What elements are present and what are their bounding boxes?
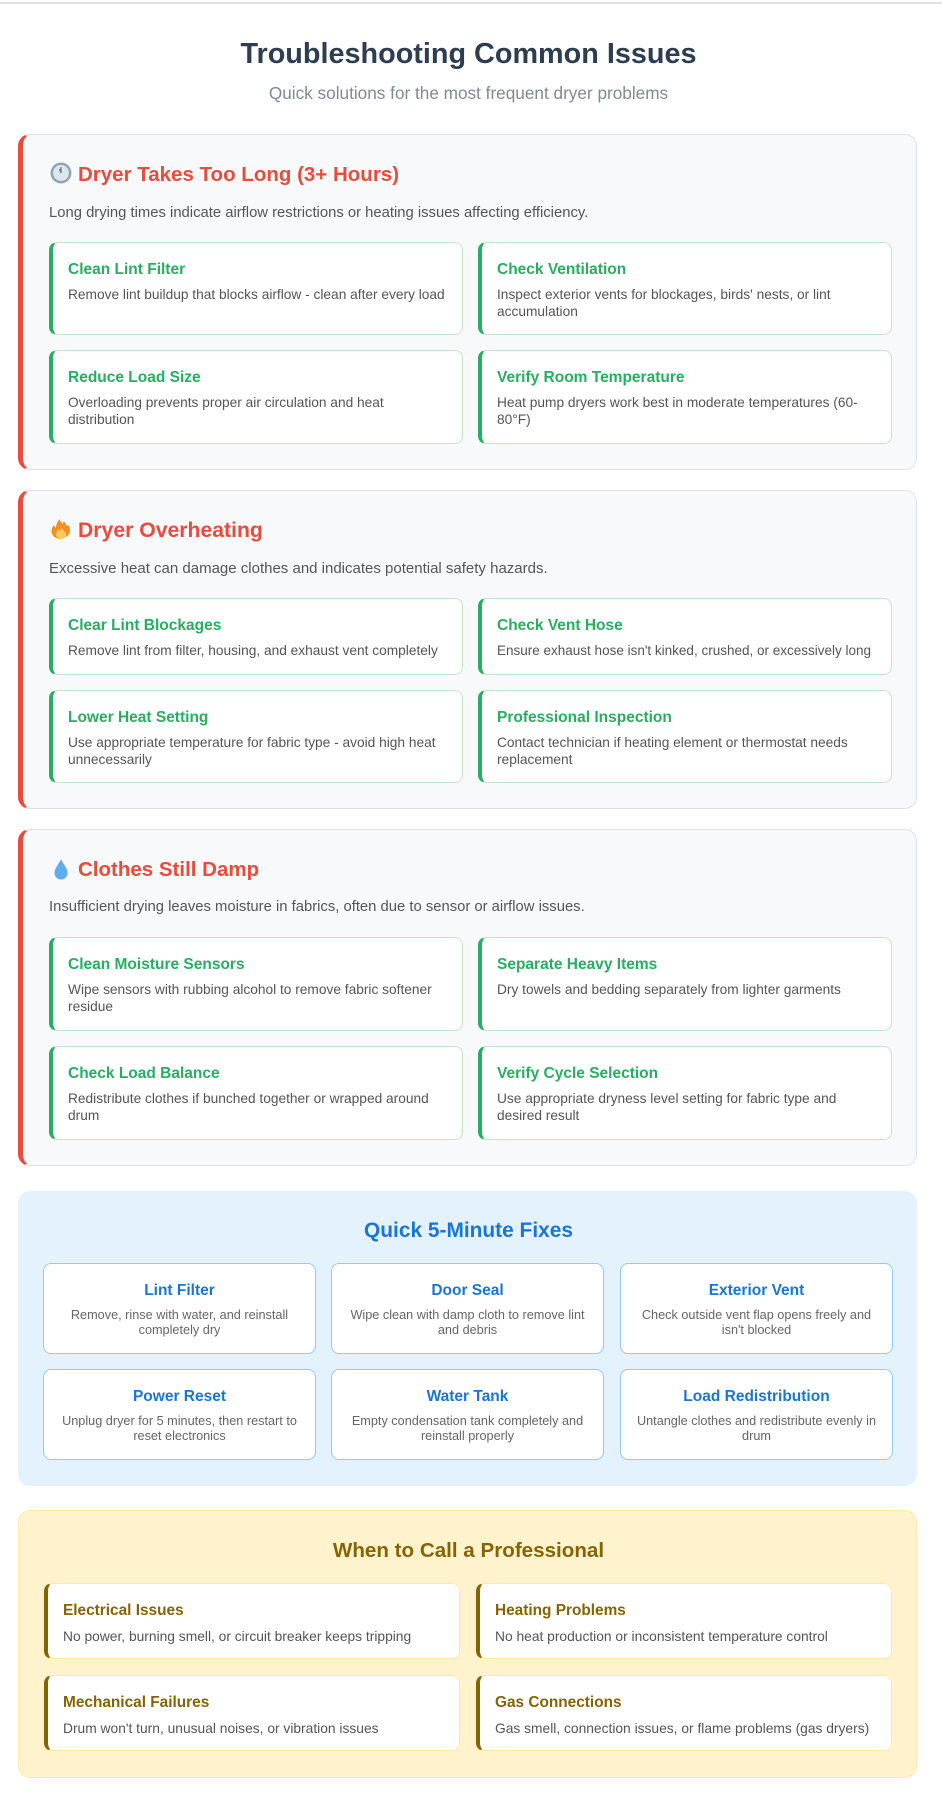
card: professional inspection: replacement: [497, 752, 572, 766]
fix: load redistribution: Untangle clothes and redistribute evenly in: [637, 1414, 876, 1428]
card: check vent hose: [478, 598, 892, 675]
fix: door seal: Door Seal: [431, 1282, 504, 1299]
card: clear lint blockages: Clear Lint Blockages: [68, 617, 221, 634]
item: mechanical failures: Drum won't turn, unusual noises, or vibration issues: [63, 1721, 379, 1736]
heading: quick fixes: Quick 5-Minute Fixes: [364, 1219, 573, 1242]
panel: clothes still damp: [18, 829, 917, 1166]
card: verify room temperature: [478, 350, 892, 444]
fix: power reset: Unplug dryer for 5 minutes, then restart to: [62, 1414, 297, 1428]
subtitle: Quick solutions for the most frequent dryer problems: [269, 83, 668, 103]
fix: load redistribution: [620, 1369, 893, 1460]
card: lower heat setting: Lower Heat Setting: [68, 709, 208, 726]
card: separate heavy items: [478, 937, 892, 1031]
card: check vent hose: Ensure exhaust hose isn't kinked, crushed, or excessively long: [497, 643, 871, 658]
card: clear lint blockages: [49, 598, 463, 675]
heading: dryer overheating: Dryer Overheating: [78, 519, 263, 542]
icon: clock: [50, 162, 72, 184]
card: clean moisture sensors: residue: [68, 998, 113, 1014]
description: Long drying times indicate airflow restrictions or heating issues affecting efficiency.: [49, 205, 588, 221]
item: gas connections: [476, 1675, 892, 1751]
item: heating problems: No heat production or inconsistent temperature control: [495, 1629, 828, 1644]
card: check ventilation: Inspect exterior vents for blockages, birds' nests, or lint: [497, 287, 831, 302]
card: clean moisture sensors: [49, 937, 463, 1031]
icon: water drop: [54, 859, 68, 880]
description: Excessive heat can damage clothes and indicates potential safety hazards.: [49, 560, 548, 577]
fix: exterior vent: [620, 1263, 893, 1354]
card: clear lint blockages: Remove lint from filter, housing, and exhaust vent completely: [68, 643, 438, 658]
fix: exterior vent: Check outside vent flap opens freely and: [642, 1308, 871, 1322]
card: clean moisture sensors: Clean Moisture Sensors: [68, 956, 245, 973]
item: heating problems: Heating Problems: [495, 1602, 626, 1619]
card: reduce load size: Overloading prevents proper air circulation and heat: [68, 395, 384, 410]
icon: flame: [52, 519, 70, 539]
panel: quick fixes: [18, 1191, 917, 1486]
item: electrical issues: No power, burning smell, or circuit breaker keeps tripping: [63, 1629, 411, 1644]
card: clean lint filter: Remove lint buildup that blocks airflow - clean after every load: [68, 287, 445, 302]
item: heating problems: [476, 1583, 892, 1659]
card: verify cycle selection: Verify Cycle Selection: [497, 1065, 658, 1082]
card: check ventilation: Check Ventilation: [497, 261, 626, 278]
fix: lint filter: Remove, rinse with water, and reinstall: [71, 1308, 288, 1322]
card: lower heat setting: [49, 690, 463, 783]
card: check load balance: Redistribute clothes if bunched together or wrapped around: [68, 1091, 429, 1106]
card: verify room temperature: Verify Room Temperature: [497, 369, 684, 386]
card: check vent hose: Check Vent Hose: [497, 617, 623, 634]
fix: water tank: reinstall properly: [421, 1428, 514, 1442]
card: separate heavy items: Dry towels and bedding separately from lighter garments: [497, 982, 841, 997]
card: check ventilation: [478, 242, 892, 335]
fix: door seal: and debris: [438, 1322, 497, 1336]
card: professional inspection: Contact technician if heating element or thermostat needs: [497, 735, 848, 750]
heading: when to call a professional: When to Call a Professional: [333, 1539, 604, 1562]
panel: when to call a professional: [18, 1510, 917, 1778]
card: clean moisture sensors: Wipe sensors with rubbing alcohol to remove fabric softener: [68, 982, 432, 997]
item: electrical issues: [44, 1583, 460, 1659]
item: electrical issues: Electrical Issues: [63, 1602, 184, 1619]
fix: door seal: Wipe clean with damp cloth to remove lint: [350, 1308, 585, 1322]
card: clean lint filter: Clean Lint Filter: [68, 261, 185, 278]
card: lower heat setting: Use appropriate temperature for fabric type - avoid high heat: [68, 735, 436, 750]
panel: dryer overheating: [18, 490, 917, 809]
card: check ventilation: accumulation: [497, 304, 578, 318]
fix: water tank: Empty condensation tank completely and: [352, 1414, 583, 1428]
fix: power reset: Power Reset: [133, 1388, 226, 1405]
fix: load redistribution: drum: [742, 1428, 771, 1442]
card: verify room temperature: Heat pump dryers work best in moderate temperatures (60-: [497, 395, 858, 410]
fix: water tank: [331, 1369, 604, 1460]
card: clean lint filter: [49, 242, 463, 335]
card: check load balance: [49, 1046, 463, 1140]
card: verify cycle selection: [478, 1046, 892, 1140]
card: reduce load size: distribution: [68, 412, 134, 426]
card: check load balance: Check Load Balance: [68, 1065, 220, 1082]
heading: dryer takes too long: Dryer Takes Too Long (3+ Hours): [78, 163, 399, 186]
fix: exterior vent: isn't blocked: [722, 1322, 791, 1336]
card: verify room temperature: 80°F): [497, 412, 531, 426]
card: reduce load size: [49, 350, 463, 444]
fix: load redistribution: Load Redistribution: [683, 1388, 830, 1405]
card: lower heat setting: unnecessarily: [68, 752, 152, 766]
fix: lint filter: completely dry: [139, 1322, 220, 1336]
fix: lint filter: [43, 1263, 316, 1354]
item: mechanical failures: [44, 1675, 460, 1751]
fix: power reset: [43, 1369, 316, 1460]
fix: door seal: [331, 1263, 604, 1354]
item: gas connections: Gas smell, connection issues, or flame problems (gas dryers): [495, 1721, 869, 1736]
panel: dryer takes too long: [18, 134, 917, 470]
fix: exterior vent: Exterior Vent: [709, 1282, 804, 1299]
card: professional inspection: Professional Inspection: [497, 709, 672, 726]
title: Troubleshooting Common Issues: [240, 38, 696, 70]
fix: lint filter: Lint Filter: [144, 1282, 215, 1299]
card: check load balance: drum: [68, 1108, 99, 1122]
fix: water tank: Water Tank: [427, 1388, 508, 1405]
description: Insufficient drying leaves moisture in fabrics, often due to sensor or airflow issues.: [49, 899, 585, 915]
item: mechanical failures: Mechanical Failures: [63, 1694, 209, 1711]
card: verify cycle selection: Use appropriate dryness level setting for fabric type and: [497, 1091, 836, 1106]
heading: clothes still damp: Clothes Still Damp: [78, 858, 259, 881]
card: verify cycle selection: desired result: [497, 1108, 579, 1122]
item: gas connections: Gas Connections: [495, 1694, 622, 1711]
card: separate heavy items: Separate Heavy Items: [497, 956, 657, 973]
fix: power reset: reset electronics: [133, 1428, 226, 1442]
card: reduce load size: Reduce Load Size: [68, 369, 201, 386]
card: professional inspection: [478, 690, 892, 783]
